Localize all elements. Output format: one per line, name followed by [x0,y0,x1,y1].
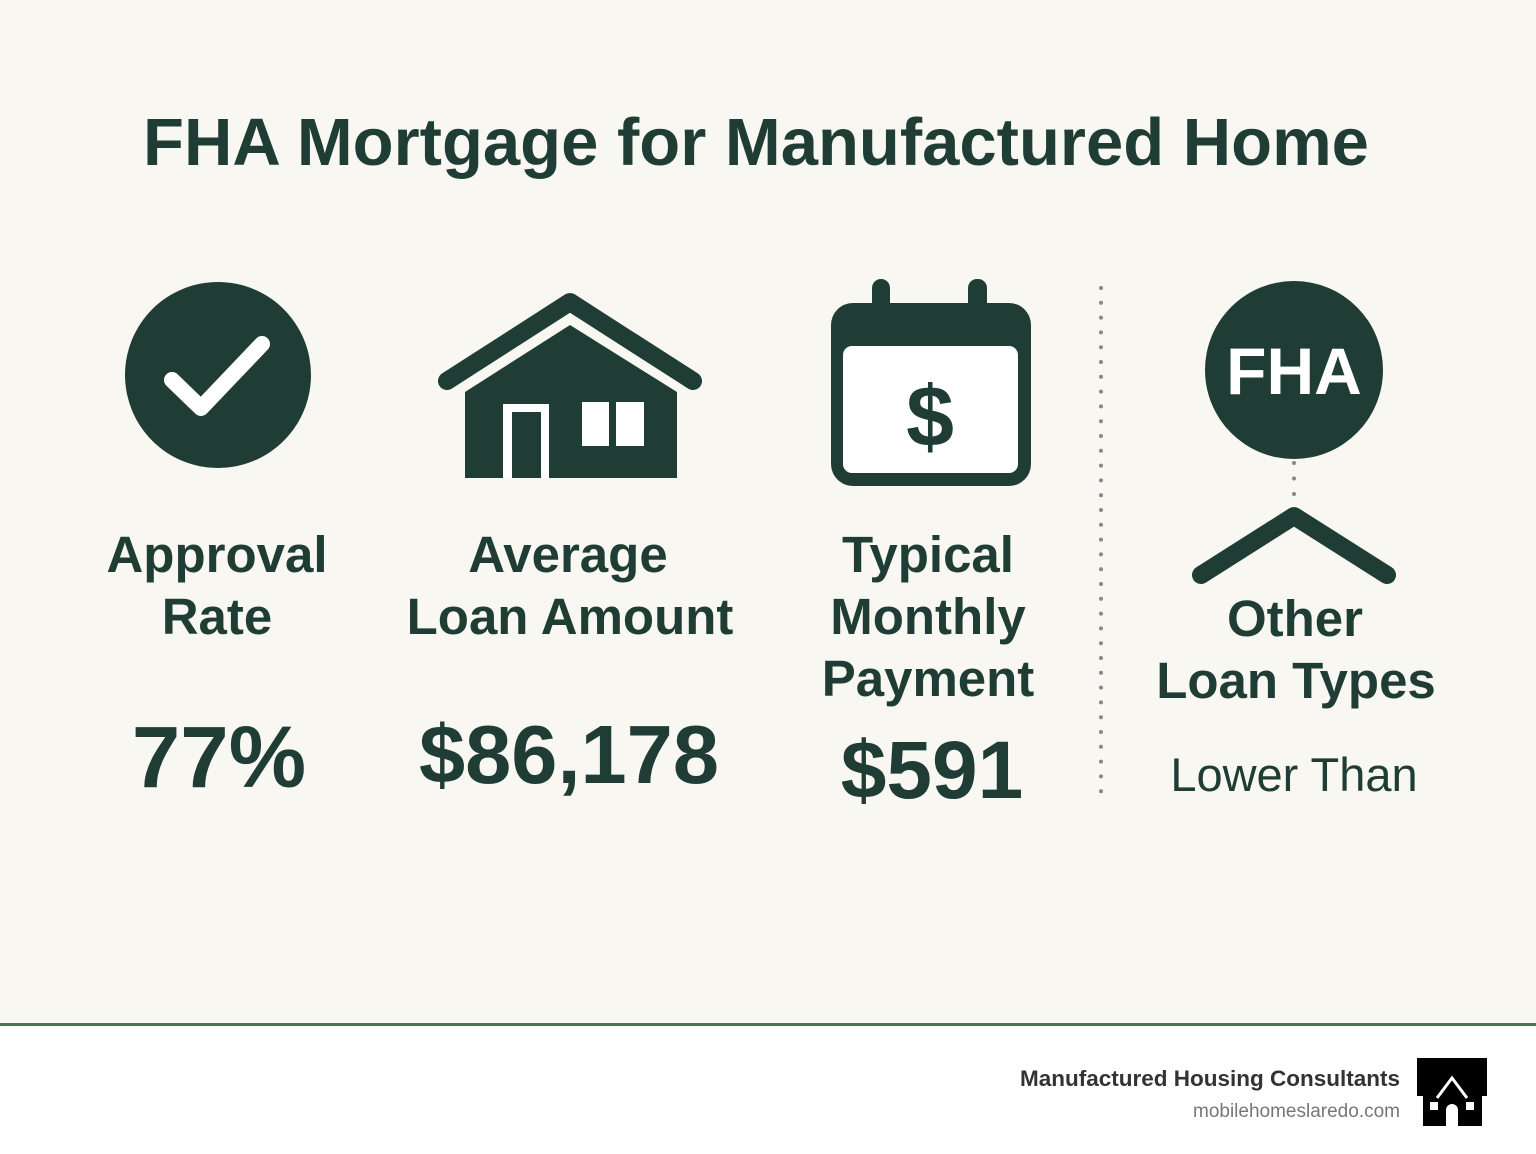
icon: check circle [125,282,311,468]
label: other loan types: Other [1227,590,1363,647]
icon: calendar dollar: $ [906,369,954,465]
icon: FHA circle [1205,281,1383,459]
icon: chevron roof [1201,516,1387,575]
panel: average loan amount [407,302,733,801]
label: approval rate: Rate [162,588,272,645]
value: $86,178: $86,178 [419,708,719,801]
icon: logo house [1417,1058,1487,1126]
footer company name: Manufactured Housing Consultants [1020,1066,1400,1091]
footer [0,1023,1536,1154]
label: average loan amount: Average [468,526,668,583]
value: 77%: 77% [132,709,306,806]
icon: FHA circle: FHA [1226,334,1362,408]
panel: typical monthly payment [822,279,1034,816]
label: average loan amount: Loan Amount [407,588,733,645]
value: $591: $591 [841,725,1023,816]
label: typical monthly payment: Payment [822,650,1034,707]
panel: approval rate [106,282,328,806]
label: typical monthly payment: Monthly [830,588,1026,645]
label: other loan types: Loan Types [1156,652,1436,709]
icon: house [447,302,693,478]
label: approval rate: Approval [106,526,328,583]
value: lower than: Lower Than [1170,748,1418,801]
label: typical monthly payment: Typical [842,526,1014,583]
footer url: mobilehomeslaredo.com [1193,1101,1400,1122]
icon: calendar dollar [831,279,1031,486]
title: FHA Mortgage for Manufactured Home [143,105,1369,180]
panel: other loan types [1156,281,1436,801]
